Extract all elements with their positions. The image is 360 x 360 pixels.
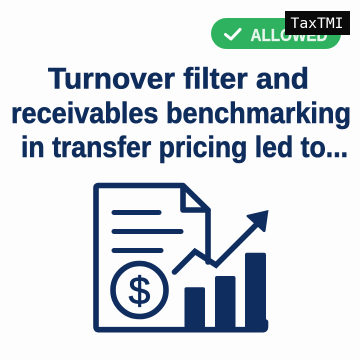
- watermark: TaxTMI: [285, 11, 350, 35]
- icon: check mark: [226, 30, 240, 39]
- bar chart: [184, 253, 266, 330]
- icon: financial document with growth chart: [96, 186, 268, 330]
- watermark: TaxTMI: TaxTMI: [290, 16, 344, 32]
- text lines: [114, 212, 181, 250]
- dollar coin: $: [129, 270, 151, 313]
- document outline: [96, 186, 266, 330]
- growth arrow: [174, 210, 268, 272]
- page fold: [183, 186, 208, 210]
- title: Turnover filter and: [48, 62, 309, 96]
- badge: allowed: [211, 18, 341, 49]
- badge label: ALLOWED: [250, 25, 328, 45]
- dollar coin: [113, 264, 166, 316]
- title: [11, 62, 351, 164]
